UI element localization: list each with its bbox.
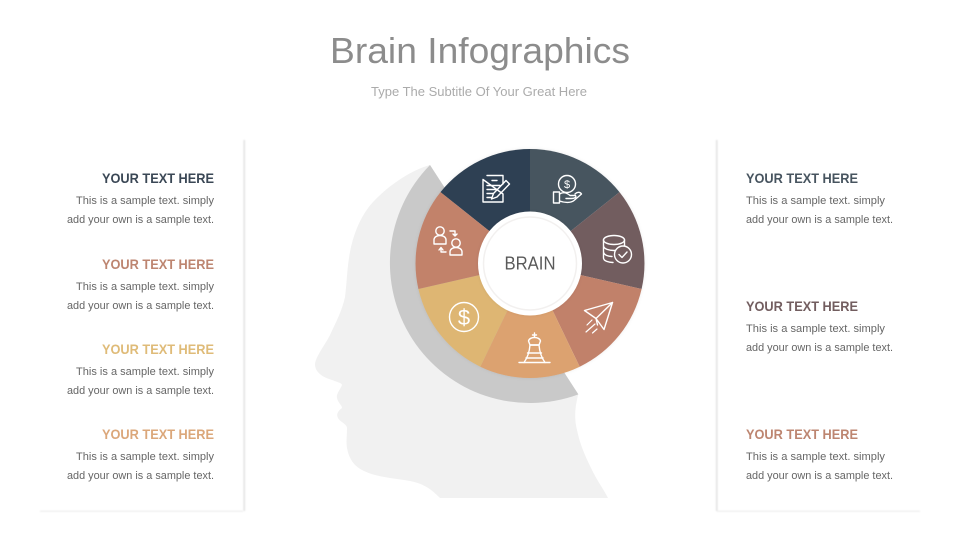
center circle: BRAIN <box>478 212 582 316</box>
icon: document and pen <box>483 176 510 202</box>
icon: people exchange <box>434 227 462 255</box>
icon: dollar coin <box>450 302 478 332</box>
icon: paper plane <box>584 302 612 333</box>
subtitle: Type The Subtitle Of Your Great Here <box>371 84 587 99</box>
right item 1: This is a sample text. simply <box>746 195 885 207</box>
left item 1: This is a sample text. simply <box>76 195 214 207</box>
right item 3: YOUR TEXT HERE <box>746 426 858 442</box>
left item 3: add your own is a sample text. <box>67 385 214 397</box>
panel: left text column <box>40 140 245 512</box>
left item 4 <box>67 426 214 482</box>
icon: database with check <box>604 236 632 263</box>
left item 4: YOUR TEXT HERE <box>102 426 214 442</box>
title: Brain Infographics <box>330 30 630 71</box>
left item 4: add your own is a sample text. <box>67 470 214 482</box>
left item 4: This is a sample text. simply <box>76 451 214 463</box>
right item 3: add your own is a sample text. <box>746 470 893 482</box>
left item 1 <box>67 170 214 226</box>
left item 1: add your own is a sample text. <box>67 214 214 226</box>
right item 2 <box>746 298 893 354</box>
right item 1 <box>746 170 893 226</box>
icon: chess piece <box>519 333 550 362</box>
segment: navy <box>440 149 530 264</box>
right item 2: YOUR TEXT HERE <box>746 298 858 314</box>
right item 2: This is a sample text. simply <box>746 323 885 335</box>
segment: terracotta right <box>530 264 642 367</box>
left item 3: YOUR TEXT HERE <box>102 341 214 357</box>
wheel: seven segments <box>416 149 644 378</box>
right item 3 <box>746 426 893 482</box>
grey arc behind the wheel <box>390 165 578 403</box>
icon: hand holding coin: $ <box>564 179 570 191</box>
left item 2: This is a sample text. simply <box>76 281 214 293</box>
left item 3: This is a sample text. simply <box>76 366 214 378</box>
segment: slate <box>530 149 620 264</box>
segment: orange <box>480 264 580 378</box>
panel: right text column <box>716 140 920 512</box>
icon: hand holding coin <box>554 176 582 203</box>
left item 3 <box>67 341 214 397</box>
right item 2: add your own is a sample text. <box>746 342 893 354</box>
left item 2 <box>67 256 214 312</box>
right item 1: YOUR TEXT HERE <box>746 170 858 186</box>
center circle: BRAIN: BRAIN <box>504 254 556 274</box>
right item 1: add your own is a sample text. <box>746 214 893 226</box>
left item 2: add your own is a sample text. <box>67 300 214 312</box>
segment: yellow <box>418 264 530 367</box>
icon: dollar coin: $ <box>458 305 470 330</box>
left item 1: YOUR TEXT HERE <box>102 170 214 186</box>
right item 3: This is a sample text. simply <box>746 451 885 463</box>
segment: terracotta left <box>416 192 530 289</box>
head silhouette <box>315 165 608 498</box>
segment: mauve <box>530 192 644 289</box>
left item 2: YOUR TEXT HERE <box>102 256 214 272</box>
